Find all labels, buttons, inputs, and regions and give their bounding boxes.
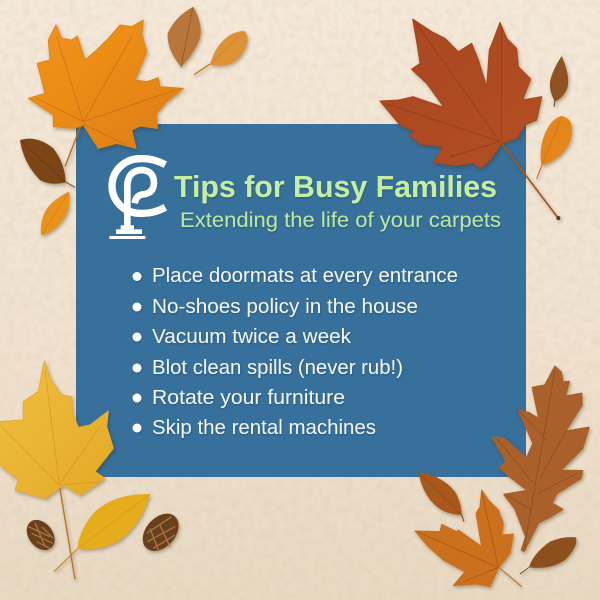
decoration: top-right leaves [380, 19, 572, 220]
heading block [174, 169, 501, 232]
logo icon [109, 159, 165, 239]
logo: P stem and bowl [127, 170, 154, 227]
title: Tips for Busy Families [174, 169, 497, 204]
leaf: oak [493, 367, 589, 551]
leaf: small brown [550, 56, 568, 107]
leaf: small orange top [194, 31, 248, 75]
logo: C ring [112, 159, 165, 213]
logo: base steps [109, 225, 145, 239]
decoration: bottom-left leaves and cones [0, 361, 186, 579]
leaf: orange maple [28, 20, 183, 167]
subtitle: Extending the life of your carpets [180, 209, 501, 232]
decoration: top-left leaves [20, 7, 248, 235]
leaf: orange maple bottom [415, 490, 522, 587]
tip 6: Skip the rental machines [152, 417, 376, 439]
leaf: yellow maple [0, 361, 113, 579]
leaf: dark brown [20, 139, 75, 187]
pine cone left [21, 514, 60, 556]
decoration: bottom-right leaves [415, 367, 589, 587]
leaf: yellow oval [54, 494, 150, 572]
tip 3: Vacuum twice a week [152, 326, 352, 348]
leaf: small orange lower [41, 192, 70, 235]
pine cone right [135, 507, 186, 558]
leaf: brown top [168, 7, 201, 68]
tip 1: Place doormats at every entrance [152, 265, 458, 287]
tips list [132, 265, 458, 439]
blue panel [76, 124, 526, 477]
tip 4: Blot clean spills (never rub!) [152, 357, 403, 379]
leaf: red maple [380, 19, 560, 220]
tip 2: No-shoes policy in the house [152, 296, 418, 318]
leaf: small brown right [520, 537, 576, 574]
leaf: orange oval [537, 116, 572, 179]
tip 5: Rotate your furniture [152, 387, 345, 409]
leaf: small brown left [418, 472, 464, 522]
